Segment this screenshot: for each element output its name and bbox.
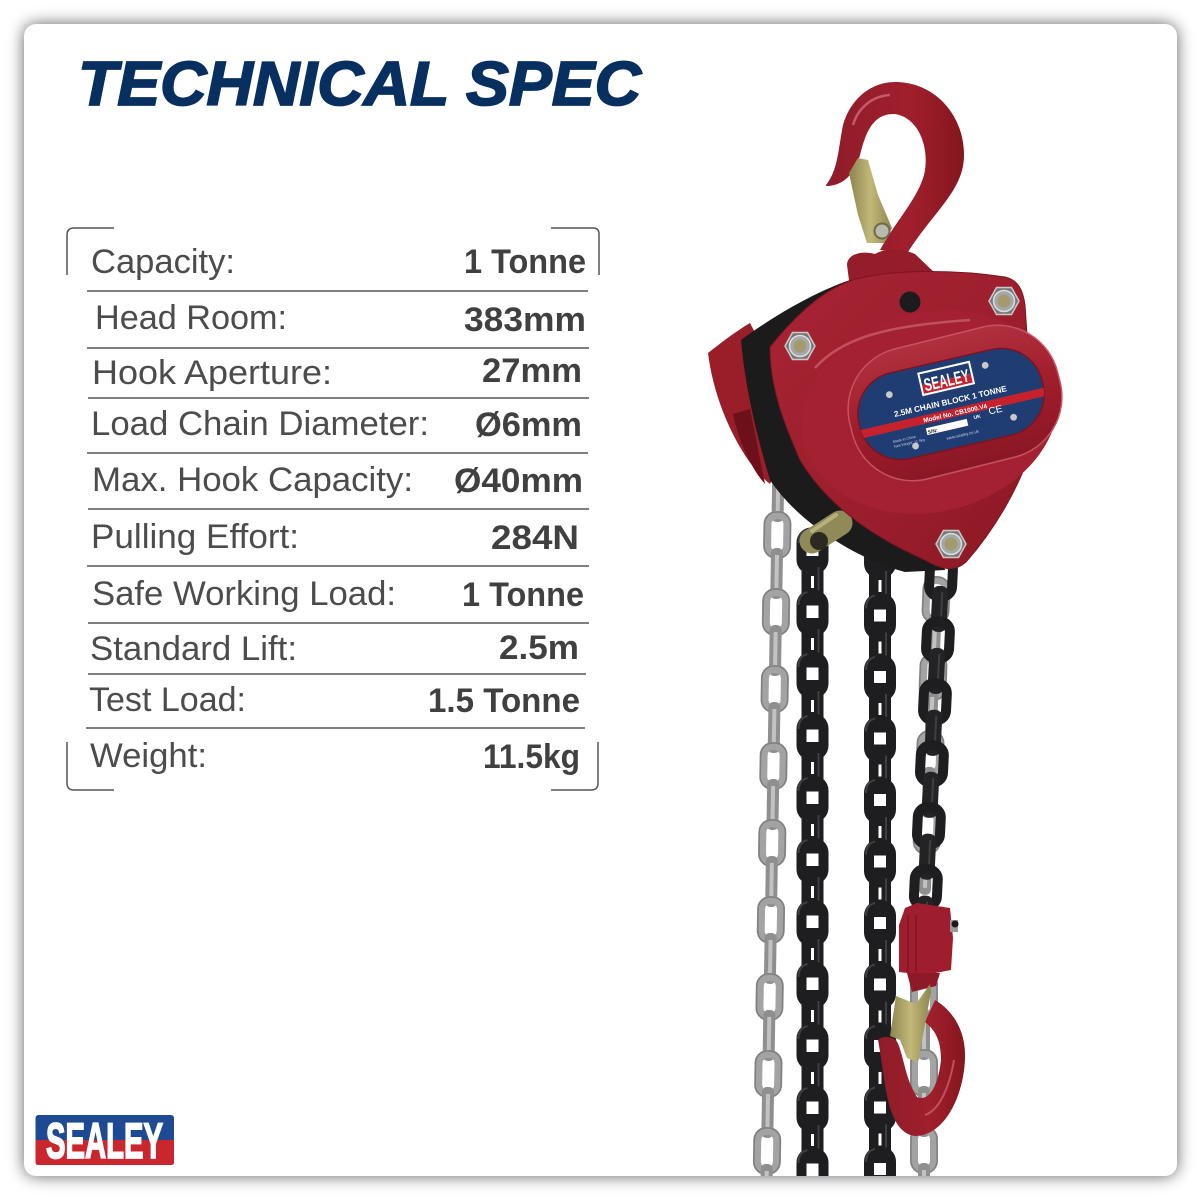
Sealey logo (36, 1113, 174, 1169)
lower hook assembly (878, 903, 965, 1136)
lower hook latch (890, 984, 931, 1062)
row: test load: 1.5 Tonne (428, 682, 580, 720)
nameplate: Model No. CB1000.V4 (923, 403, 988, 425)
nameplate (857, 348, 1045, 460)
lower hook (878, 1000, 965, 1136)
oval housing ring (835, 312, 1075, 494)
swivel mount (847, 249, 938, 288)
row: capacity: Capacity: (91, 243, 235, 281)
table corner brackets (67, 228, 599, 790)
row: safe working load: Safe Working Load: (92, 575, 396, 613)
chain guide lug (810, 515, 840, 550)
row: load chain diameter (91, 405, 582, 444)
nameplate: Made in China (893, 435, 916, 444)
title: TECHNICAL SPEC (78, 50, 642, 119)
row: head room: Head Room: (95, 299, 287, 337)
row: max hook capacity: Max. Hook Capacity: (92, 461, 413, 499)
row: head room (95, 299, 586, 339)
row: pulling effort: Pulling Effort: (91, 518, 299, 556)
top plug (900, 292, 920, 312)
row: standard lift: Standard Lift: (90, 630, 297, 668)
row: capacity: 1 Tonne (464, 243, 586, 281)
black chain wheel band (741, 280, 945, 572)
row: safe working load: 1 Tonne (462, 576, 584, 614)
row: hook aperture (92, 352, 582, 392)
hook neck (907, 973, 940, 992)
nameplate: CE (988, 404, 1004, 418)
bolts (785, 288, 1019, 558)
top hook (826, 82, 964, 252)
hook safety latch (849, 158, 892, 243)
front plate (770, 271, 1034, 569)
row: max hook capacity: Ø40mm (454, 462, 583, 500)
product illustration: chain block (708, 82, 1080, 1200)
row dividers (86, 291, 589, 728)
row: hook aperture: 27mm (482, 352, 582, 390)
row: capacity (91, 243, 586, 281)
row: weight: Weight: (90, 737, 207, 775)
back plate (708, 323, 800, 484)
row: pulling effort: 284N (491, 519, 579, 557)
nameplate: UK (973, 414, 982, 421)
nameplate: www.sealey.co.uk (946, 428, 980, 441)
row: pulling effort (91, 518, 579, 557)
row: load chain diameter: Load Chain Diameter: (91, 405, 429, 443)
row: head room: 383mm (464, 301, 586, 339)
row: load chain diameter: Ø6mm (475, 406, 582, 444)
row: max hook capacity (92, 461, 583, 500)
nameplate logo: SEALEY (922, 365, 971, 395)
Sealey logo: SEALEY (46, 1113, 163, 1169)
specification table (67, 228, 599, 790)
raised housing bulge (780, 284, 1080, 540)
row: test load (89, 681, 580, 720)
row: weight (90, 737, 580, 776)
row: weight: 11.5kg (483, 738, 580, 776)
row: standard lift: 2.5m (499, 629, 579, 667)
row: test load: Test Load: (89, 681, 246, 719)
chains (753, 435, 953, 1200)
nameplate: 2.5M CHAIN BLOCK 1 TONNE (893, 384, 1008, 419)
infographic artwork (36, 60, 1063, 1176)
hook block (899, 903, 953, 975)
block pin (950, 920, 958, 932)
nameplate: S/N: (927, 428, 939, 436)
row: hook aperture: Hook Aperture: (92, 354, 332, 392)
row: safe working load (92, 575, 584, 614)
nameplate logo (917, 361, 975, 396)
nameplate: Nett Weight: 11.5kg (894, 438, 925, 449)
row: standard lift (90, 629, 579, 668)
